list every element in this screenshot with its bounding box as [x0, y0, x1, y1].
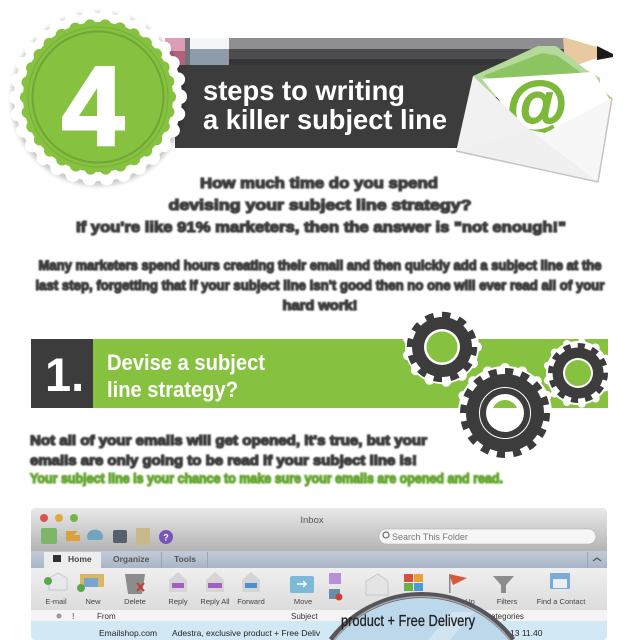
pencil	[165, 37, 613, 65]
ribbon icons	[44, 572, 570, 600]
title text: steps to writing	[203, 75, 405, 106]
at sign: @	[507, 70, 567, 139]
tab strip: Tools	[174, 554, 196, 564]
window title bar: Search This Folder	[392, 532, 468, 542]
message list header: !	[72, 612, 75, 621]
window title bar	[31, 508, 607, 551]
message list header: ategories	[491, 612, 524, 621]
ribbon toolbar: Find a Contact	[537, 597, 586, 606]
ribbon toolbar: Forward	[237, 597, 265, 606]
step heading: Devise a subject	[107, 350, 266, 375]
ribbon toolbar: Move	[294, 597, 312, 606]
step number: 1.	[45, 348, 84, 401]
ribbon toolbar: New	[85, 597, 101, 606]
tab strip	[31, 551, 607, 568]
ribbon toolbar	[31, 568, 607, 610]
highlighted takeaway: Your subject line is your chance to make sure your emails are opened and read.	[30, 471, 503, 486]
ribbon toolbar: Up	[465, 597, 475, 606]
ribbon toolbar: Delete	[124, 597, 146, 606]
title text	[203, 75, 447, 135]
gear: top left	[405, 310, 479, 384]
intro paragraph: hard work!	[282, 298, 358, 313]
selected message row: Adestra, exclusive product + Free Deliv	[172, 628, 321, 638]
selected message row	[31, 621, 607, 640]
message list header: Subject	[291, 612, 318, 621]
selected message row: Emailshop.com	[99, 628, 157, 638]
search field	[379, 529, 596, 544]
window title bar: ?	[163, 532, 169, 542]
step 1 body text: Not all of your emails will get opened, it's true, but your	[30, 433, 428, 448]
tab strip: Home	[68, 554, 92, 564]
step 1 banner	[31, 339, 608, 408]
gear: right	[546, 341, 610, 405]
magnifying glass	[331, 595, 513, 640]
step 1 body text	[30, 433, 503, 486]
intro question: How much time do you spend	[200, 175, 438, 192]
selected message row: 13 11.40	[510, 628, 543, 638]
step 1 body text: emails are only going to be read if your subject line is!	[30, 453, 417, 468]
intro paragraph: Many marketers spend hours creating their email and then quickly add a subject line at the	[38, 258, 602, 273]
intro paragraph: last step, forgetting that if your subject line isn't good then no one will ever read all of your	[36, 278, 605, 293]
tab strip: Organize	[113, 554, 150, 564]
message list header: From	[97, 612, 116, 621]
ribbon toolbar: E-mail	[45, 597, 67, 606]
screenshot: mail client inbox	[31, 508, 607, 640]
intro question: If you're like 91% marketers, then the answer is "not enough!"	[76, 219, 566, 236]
intro paragraph	[36, 258, 605, 313]
window title bar: Inbox	[300, 515, 324, 526]
intro question	[76, 175, 566, 236]
icon: envelope	[456, 46, 612, 182]
ribbon toolbar: Reply All	[200, 597, 230, 606]
badge: 4 steps	[11, 12, 185, 186]
ribbon toolbar: Reply	[168, 597, 188, 606]
numeral 4: 4	[62, 44, 124, 169]
message list header	[31, 610, 607, 621]
gear: large	[458, 366, 552, 460]
title panel	[175, 65, 500, 148]
intro question: devising your subject line strategy?	[168, 197, 472, 214]
magnifying glass: product + Free Delivery	[341, 613, 475, 630]
title text: a killer subject line	[203, 104, 447, 135]
step heading	[107, 350, 266, 402]
ribbon toolbar: Filters	[497, 597, 517, 606]
step heading: line strategy?	[107, 377, 238, 402]
